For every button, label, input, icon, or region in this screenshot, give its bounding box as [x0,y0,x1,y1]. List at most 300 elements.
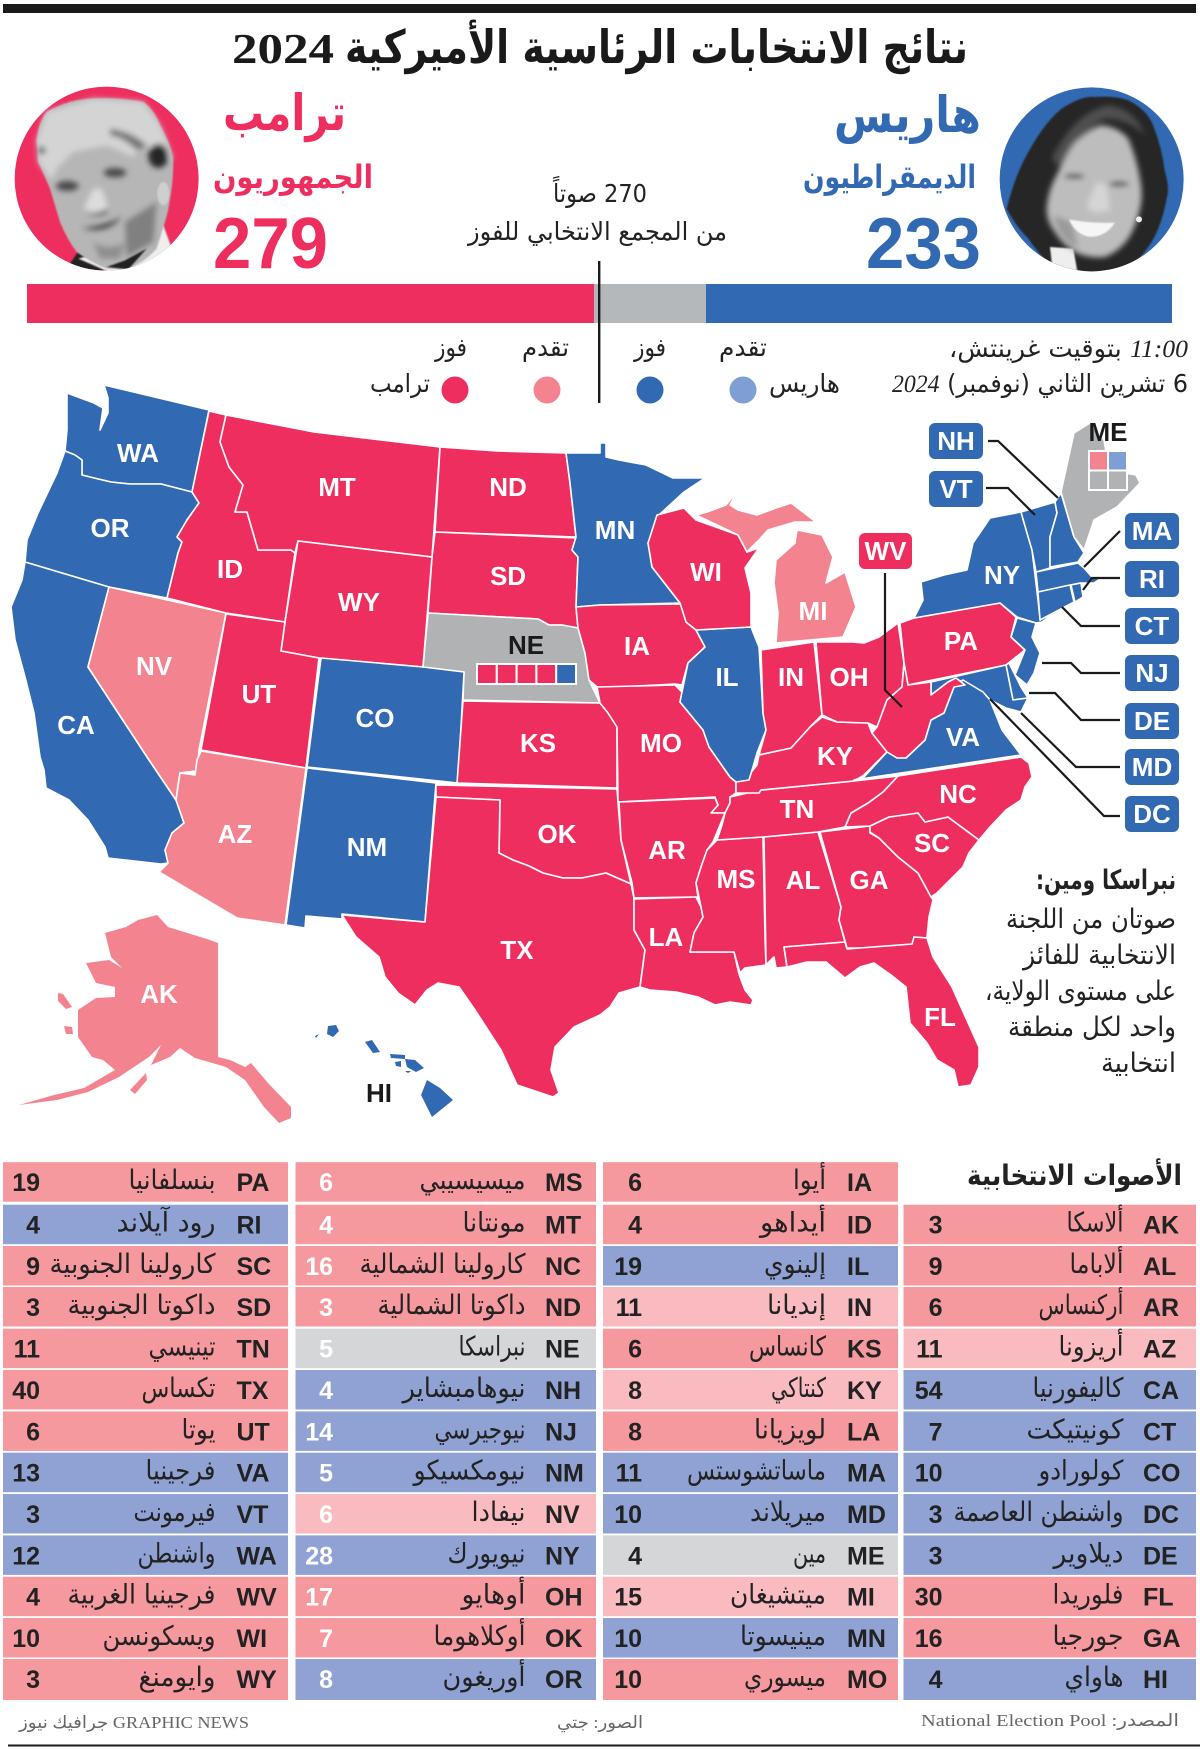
state: IL: IL [715,662,739,692]
row: MS: MS [545,1169,582,1197]
row: RI: RI [236,1212,262,1240]
row: FL [904,1577,1196,1616]
row: MA: ماساتشوستس [687,1456,826,1487]
note: Nebraska and Maine: انتخابية [1101,1048,1176,1079]
row: OR: 8 [319,1666,333,1694]
table column 4 [904,1204,1196,1700]
row: CA: CA [1143,1377,1179,1405]
row: NJ: نيوجيرسي [434,1414,526,1445]
row: NE [296,1329,596,1368]
row: NE: NE [545,1336,580,1364]
state: NC: NC [939,779,977,809]
row: NM [296,1453,596,1492]
callout: NH [929,423,983,459]
state: LA: LA [649,922,684,952]
legend: فوز [632,333,666,362]
state: TN [717,776,898,840]
row: NY: 28 [305,1542,333,1570]
row: AZ: 11 [916,1336,943,1364]
votes: 279: 279 [213,204,328,284]
row: AR: 6 [929,1294,942,1322]
name: Trump: ترامب [223,84,346,143]
row: AZ: AZ [1143,1336,1176,1364]
row: MA [603,1453,898,1492]
row: TX: تكساس [142,1373,216,1404]
callout: MD: MD [1132,752,1172,782]
state: MT [220,415,440,557]
state: AK [19,915,291,1123]
state: MI [696,490,856,643]
state: MT: MT [318,472,356,502]
state: MN [566,443,705,607]
row: VT: فيرمونت [134,1497,216,1528]
row: NV: 6 [319,1501,333,1529]
row: MS: ميسيسيبي [420,1165,526,1196]
row: SD [3,1287,288,1326]
row: TX [3,1370,288,1410]
row: SC: كارولينا الجنوبية [50,1249,216,1280]
row: UT: 6 [26,1418,40,1446]
row: IA: أيوا [793,1161,826,1196]
state: AZ [159,751,306,925]
row: SD: داكوتا الجنوبية [68,1290,216,1321]
footer: source: المصدر: National Election Pool [921,1711,1179,1730]
row: CO: كولورادو [1037,1456,1124,1487]
state: OR: OR [90,513,130,543]
row: TN: TN [236,1336,270,1364]
state: FL [784,937,979,1087]
row: LA: لويزيانا [754,1414,826,1445]
row: DC: 3 [929,1501,942,1529]
row: HI: 4 [929,1666,943,1694]
row: ME: 4 [628,1542,642,1570]
state: AR: AR [648,835,686,865]
row: OR: OR [545,1666,582,1694]
row: IN: إنديانا [767,1290,826,1321]
row: VA: فرجينيا [146,1456,216,1487]
table column 3 [603,1161,898,1700]
footer: credit: GRAPHIC NEWS جرافيك نيوز [18,1713,249,1732]
callout: WV [859,533,912,569]
state: MS [690,837,766,973]
state: WI [648,508,759,630]
name: Harris: هاريس [834,86,981,144]
row: GA: GA [1143,1625,1180,1653]
legend: تقدم [522,333,569,362]
row: RI [3,1205,288,1244]
row: ID: 4 [628,1212,642,1240]
row: UT: يوتا [182,1414,216,1445]
row: PA [3,1162,288,1202]
row: ND: داكوتا الشمالية [378,1290,526,1321]
row: NM: NM [545,1460,584,1488]
state: NC [845,757,1032,840]
row: MD: ميريلاند [750,1497,826,1528]
row: WV: 4 [26,1584,40,1612]
row: ID [603,1204,898,1244]
row: DE [904,1535,1196,1575]
row: AL: 9 [929,1253,942,1281]
threshold note: 270 صوتاً [552,176,647,208]
row: NC [296,1246,596,1286]
state: TX: TX [500,935,534,965]
state: ID: ID [217,554,243,584]
row: AK: AK [1143,1212,1179,1240]
legend: تقدم [719,333,767,362]
state: OK: OK [538,819,577,849]
callout: MA [1125,513,1179,549]
state: UT [201,614,319,768]
state: RI [1071,583,1083,602]
state: IN: IN [778,662,804,692]
state: TN: TN [780,794,814,824]
row: NM: 5 [319,1460,333,1488]
row: MT: 4 [319,1212,333,1240]
state: VA [854,680,1021,780]
row: NJ [296,1411,596,1451]
state: MD [931,665,1028,712]
row: NH [296,1370,596,1410]
row: WA: واشنطن [138,1538,216,1569]
callout: VT: VT [939,474,973,504]
table column 1 [3,1162,288,1700]
state: ID [167,411,295,622]
state: CT [1038,585,1074,620]
row: MT: مونتانا [462,1208,526,1239]
row: FL: FL [1143,1584,1174,1612]
row: AR: AR [1143,1294,1179,1322]
row: NJ: NJ [545,1418,577,1446]
row: RI: 4 [26,1212,40,1240]
row: TX: 40 [12,1377,40,1405]
row: OK: OK [545,1625,582,1653]
row: IL: IL [847,1253,869,1281]
row: NH: نيوهامبشاير [401,1373,526,1404]
row: DE: ديلاوير [1052,1538,1124,1569]
callout: CT [1125,608,1179,644]
state: NM [286,768,436,928]
row: UT: UT [236,1418,270,1446]
row: MN: 10 [614,1625,642,1653]
row: TN: تينيسي [148,1332,216,1363]
row: CA: كاليفورنيا [1032,1373,1124,1404]
state: MA [1036,563,1103,592]
state: AL [764,832,845,968]
row: AZ [904,1328,1196,1368]
row: AL: ألاباما [1070,1245,1124,1280]
row: NJ: 14 [305,1418,333,1446]
note: Nebraska and Maine: صوتان من اللجنة [1006,904,1176,935]
row: VA: VA [236,1460,269,1488]
row: MD: MD [847,1501,886,1529]
row: CT [904,1411,1196,1451]
row: NE: نبراسكا [458,1332,526,1363]
callout: NJ [1125,655,1179,691]
row: CT: كونيتيكت [1026,1414,1124,1445]
row: LA [603,1411,898,1451]
row: AL: AL [1143,1253,1176,1281]
row: VT: VT [236,1501,268,1529]
row: VA: 13 [12,1460,40,1488]
state: ME: ME [1088,417,1128,447]
state: ME [1061,417,1140,550]
row: CO [904,1453,1196,1492]
row: ID: أيداهو [758,1204,826,1239]
state: KS [457,701,617,788]
row: IL [603,1246,898,1286]
row: OH [296,1576,596,1616]
state: IA [576,604,705,688]
state: KY: KY [817,741,853,771]
callout: DE [1125,703,1179,739]
state: NV: NV [136,651,173,681]
state: GA [820,826,933,948]
state: VT [1021,502,1057,572]
row: KY: 8 [628,1377,642,1405]
row: NV: NV [545,1501,580,1529]
state: CO: CO [356,703,394,733]
row: GA [904,1618,1196,1658]
callout: RI: RI [1139,564,1165,594]
row: OR [296,1658,596,1700]
row: OK [296,1617,596,1658]
row: IA: IA [847,1169,872,1197]
note: Nebraska and Maine: واحد لكل منطقة [1008,1012,1176,1043]
state: MS: MS [716,864,756,894]
row: DE: 3 [929,1542,942,1570]
row: IL: إلينوي [764,1249,826,1280]
callout: WV: WV [865,536,907,566]
row: CA [904,1370,1196,1410]
legend: فوز [433,333,467,362]
row: NM: نيومكسيكو [412,1456,526,1487]
row: MI: MI [847,1584,875,1612]
state: MO: MO [640,728,682,758]
row: ME: مين [793,1538,826,1569]
row: OK: أوكلاهوما [434,1617,526,1652]
state: ND: ND [489,472,527,502]
row: MN [603,1618,898,1658]
state: GA: GA [850,865,889,895]
row: DE: DE [1143,1542,1178,1570]
row: ME [603,1535,898,1575]
state: PA [900,603,1025,685]
state: WV [872,663,965,758]
footer: photos: الصور: جتي [557,1713,643,1733]
panel: Harris [803,86,1184,284]
row: WA [3,1535,288,1575]
row: NH: 4 [319,1377,333,1405]
row: OK: 7 [319,1625,333,1653]
row: NH: NH [545,1377,581,1405]
row: MO: MO [847,1666,887,1694]
state: NM: NM [347,832,387,862]
state: PA: PA [944,626,978,656]
row: ND: 3 [319,1294,333,1322]
row: SC: 9 [26,1253,40,1281]
callout: DE: DE [1134,706,1170,736]
state: CA [11,562,184,864]
row: MO: 10 [614,1666,642,1694]
row: KY: KY [847,1377,882,1405]
callout: MA: MA [1132,516,1172,546]
state: IA: IA [624,631,650,661]
seat bar [27,284,1172,323]
row: IA: 6 [628,1169,642,1197]
callout: CT: CT [1135,611,1169,641]
row: AK: ألاسكا [1066,1204,1124,1239]
threshold note [466,176,727,247]
state: WI: WI [690,557,722,587]
state: MI: MI [799,596,827,626]
row: ND [296,1287,596,1326]
row: AK: 3 [929,1212,942,1240]
state: UT: UT [242,679,276,709]
row: ID: ID [847,1212,872,1240]
map of United States [11,385,1140,1123]
table column 2 [296,1162,596,1700]
row: PA: PA [236,1169,269,1197]
callout: MD [1125,749,1179,785]
row: IN: IN [847,1294,872,1322]
row: TX: TX [236,1377,269,1405]
row: MA: MA [847,1460,886,1488]
row: IL: 19 [614,1253,642,1281]
state: NY: NY [984,560,1020,590]
row: IN [603,1287,898,1326]
row: DC: واشنطن العاصمة [954,1497,1124,1528]
state: NJ [1011,618,1040,685]
row: NY: نيويورك [448,1538,526,1569]
row: NY [296,1535,596,1575]
row: CO: CO [1143,1460,1180,1488]
state: FL: FL [924,1002,956,1032]
state: WA: WA [117,438,159,468]
state: MN: MN [595,515,635,545]
timestamp [892,334,1188,398]
row: MA: 11 [616,1460,642,1488]
row: NE: 5 [319,1336,333,1364]
callout leaders [885,441,1120,816]
legend [370,333,840,404]
state: LA [634,897,753,1005]
row: UT [3,1411,288,1451]
row: OH: 17 [305,1584,333,1612]
row: AR [904,1286,1196,1326]
row: GA: 16 [915,1625,942,1653]
state: AR [619,798,725,898]
row: SC [3,1246,288,1286]
state: CA: CA [57,710,95,740]
row: MS [296,1162,596,1202]
top rule [3,4,1196,13]
row: OH: OH [545,1584,582,1612]
state: SD: SD [490,561,526,591]
row: VT: 3 [26,1501,40,1529]
state: SC: SC [914,828,950,858]
state: WA [65,385,209,492]
state: AZ: AZ [218,819,252,849]
state: NH [1050,493,1084,567]
row: WY: وايومنغ [138,1662,216,1693]
row: NC: 16 [305,1253,333,1281]
row: AK [904,1204,1196,1244]
row: IN: 11 [616,1294,642,1322]
state: SD [428,532,578,628]
row: WI: ويسكونسن [102,1621,216,1652]
row: MT: MT [545,1212,581,1240]
row: HI: HI [1143,1666,1168,1694]
state: NE: NE [508,630,544,660]
row: MI: 15 [614,1584,642,1612]
ME district squares [1089,451,1127,490]
row: FL: فلوريدا [1052,1580,1124,1611]
row: LA: LA [847,1418,880,1446]
row: WY: WY [236,1666,277,1694]
state: AK: AK [140,979,178,1009]
note: Nebraska and Maine: الانتخابية للفائز [1021,940,1176,971]
portrait: Harris [1000,87,1184,277]
state: NY [914,512,1062,623]
row: FL: 30 [915,1584,942,1612]
legend: هاريس [769,369,840,398]
state: OH: OH [830,662,868,692]
state: KY [736,717,887,793]
row: WI: 10 [12,1625,40,1653]
NE district squares [477,664,576,684]
row: CA: 54 [915,1377,943,1405]
note: Nebraska and Maine [985,865,1176,1079]
row: HI [904,1659,1196,1700]
callout: RI [1125,561,1179,597]
row: MS: 6 [319,1169,333,1197]
row: ND: ND [545,1294,581,1322]
votes: 233: 233 [866,204,981,284]
row: NY: NY [545,1542,580,1570]
row: KY [603,1370,898,1410]
title: نتائج الانتخابات الرئاسية الأميركية [345,19,968,74]
state: IL [680,627,766,782]
party: Republicans: الجمهوريون [213,158,373,196]
row: DC: DC [1143,1501,1179,1529]
row: ME: ME [847,1542,884,1570]
row: VT [3,1494,288,1534]
row: AL [904,1245,1196,1286]
row: WY [3,1659,288,1700]
threshold line [598,261,600,403]
row: PA: بنسلفانيا [128,1165,216,1196]
row: MO [603,1659,898,1700]
state: MO [597,685,736,813]
row: WV: WV [236,1584,277,1612]
timestamp: 11:00 بتوقيت غرينتش، [949,334,1188,363]
row: CT: CT [1143,1418,1176,1446]
row: KS: كانساس [749,1332,826,1363]
portrait: Trump [15,87,199,275]
state: WY [281,541,432,667]
state: KS: KS [520,728,556,758]
row: NC: NC [545,1253,581,1281]
state: NV [88,587,226,800]
state: SC [870,813,979,897]
row: OH: أوهايو [460,1576,526,1611]
row: SD: SD [236,1294,271,1322]
state: CO [307,658,464,783]
state: NE [423,613,600,703]
threshold note: من المجمع الانتخابي للفوز [466,217,727,247]
state: OK [436,785,631,884]
row: WV: فرجينيا الغربية [68,1580,216,1611]
